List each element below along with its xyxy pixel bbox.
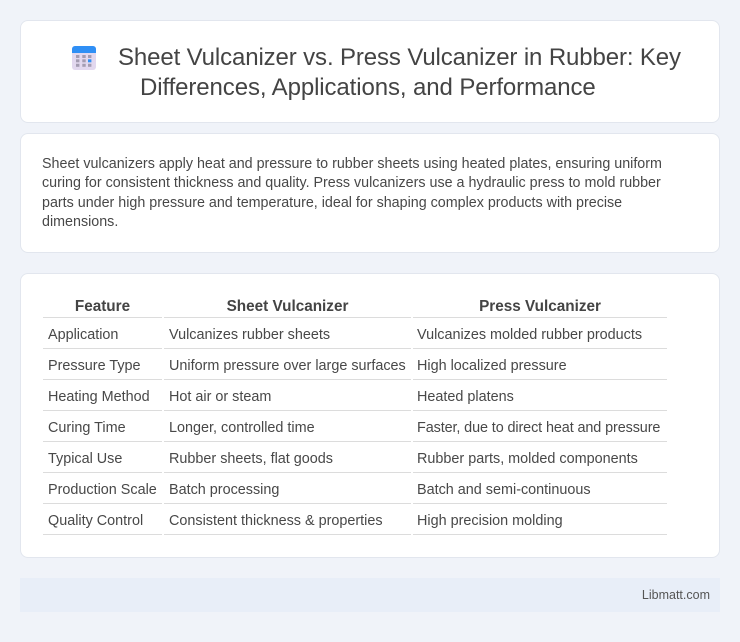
row: pressure type: Pressure Type [48,358,141,374]
heading: Sheet Vulcanizer vs. Press Vulcanizer in Rubber: Key [118,44,681,71]
row: production scale: Batch processing [169,482,279,498]
row: curing time: Longer, controlled time [169,420,315,436]
panel: comparison table [20,273,720,558]
row: pressure type: High localized pressure [417,358,567,374]
table header: Sheet Vulcanizer [227,298,348,315]
row: pressure type [43,358,667,380]
description text: parts under high pressure and temperature, ideal for shaping complex products with precise [42,195,622,211]
panel: title [20,20,720,123]
description text: Sheet vulcanizers apply heat and pressure to rubber sheets using heated plates, ensuring uniform [42,156,662,172]
heading: Differences, Applications, and Performance [140,74,596,101]
row: curing time: Curing Time [48,420,126,436]
icon: calendar [72,46,96,70]
panel: description [20,133,720,253]
row: application: Application [48,327,118,343]
footer [20,578,720,612]
row: typical use: Rubber sheets, flat goods [169,451,333,467]
row: curing time [43,420,667,442]
row: typical use [43,451,667,473]
row: application: Vulcanizes molded rubber products [417,327,642,343]
row: application: Vulcanizes rubber sheets [169,327,330,343]
row: heating method: Heated platens [417,389,514,405]
row: quality control [43,513,667,535]
row: pressure type: Uniform pressure over large surfaces [169,358,406,374]
footer credit: Libmatt.com [642,588,710,602]
row: production scale: Batch and semi-continuous [417,482,591,498]
row: typical use: Typical Use [48,451,122,467]
table header: Press Vulcanizer [479,298,601,315]
row: heating method: Hot air or steam [169,389,271,405]
row: quality control: Quality Control [48,513,143,529]
row: quality control: High precision molding [417,513,563,529]
table header: Feature [75,298,130,315]
description text: dimensions. [42,214,118,230]
description text: curing for consistent thickness and quality. Press vulcanizers use a hydraulic press to mold rubber [42,175,661,191]
description text [42,156,662,230]
row: production scale [43,482,667,504]
table header [43,298,667,318]
row: quality control: Consistent thickness & properties [169,513,383,529]
row: typical use: Rubber parts, molded components [417,451,638,467]
row: production scale: Production Scale [48,482,157,498]
heading [118,44,681,101]
row: curing time: Faster, due to direct heat and pressure [417,420,660,436]
row: application [43,327,667,349]
row: heating method: Heating Method [48,389,150,405]
row: heating method [43,389,667,411]
